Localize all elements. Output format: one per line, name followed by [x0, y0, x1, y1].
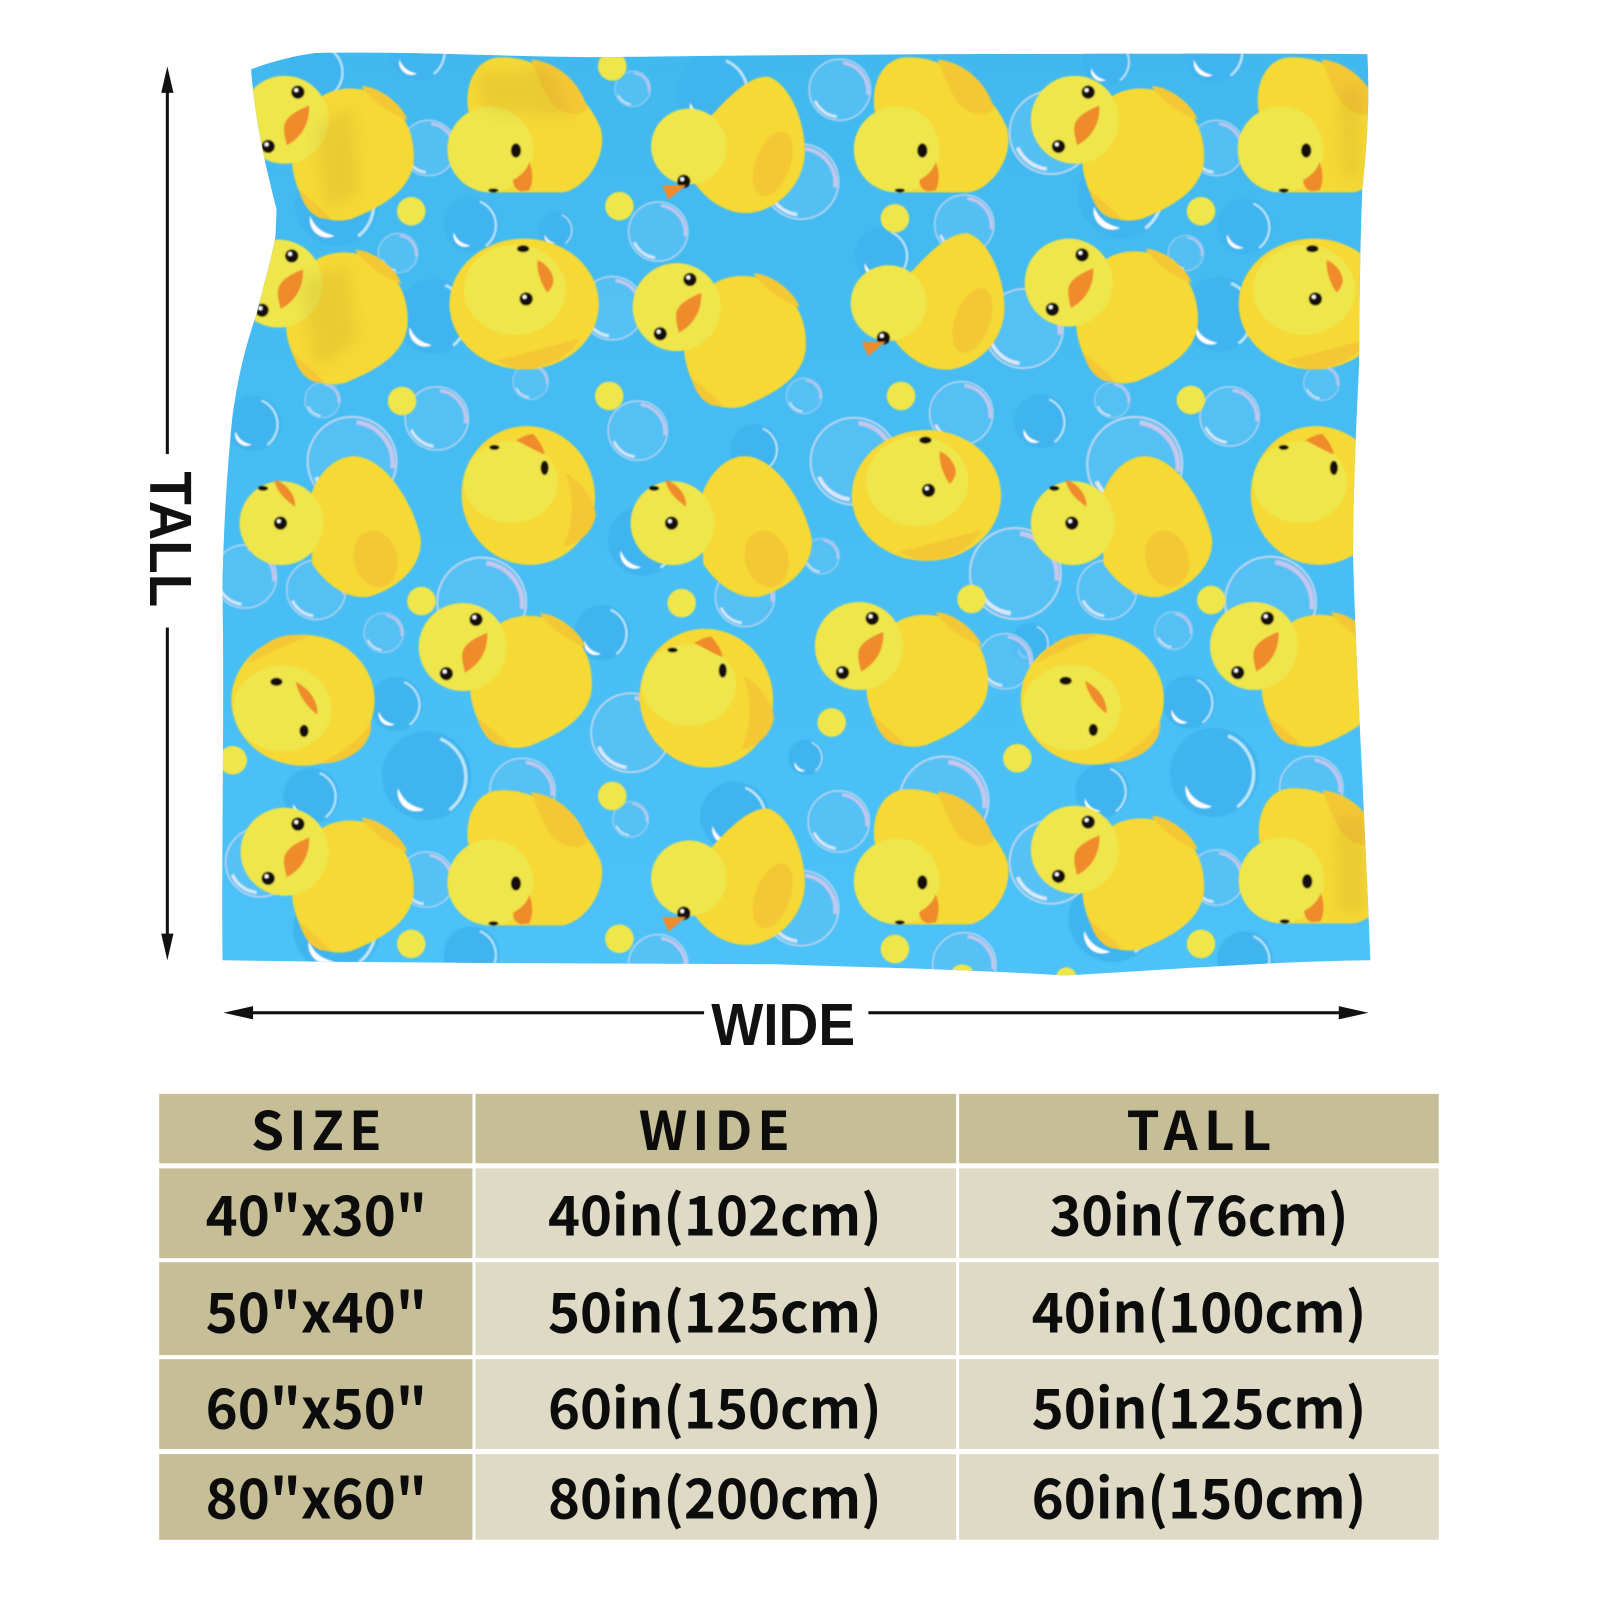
fabric fold shading — [301, 67, 1365, 913]
row 80x60: 80"x60" — [206, 1454, 427, 1534]
row 50x40: 50in(125cm) — [548, 1269, 882, 1349]
table cell backgrounds — [159, 1094, 1439, 1540]
tall label: TALL — [137, 471, 204, 607]
row 60x50: 60in(150cm) — [548, 1365, 882, 1445]
size table — [159, 1089, 1439, 1540]
duck row 3 — [238, 425, 1356, 598]
table header row: SIZE — [251, 1089, 382, 1166]
row 80x60 — [206, 1454, 1366, 1534]
row 80x60: 80in(200cm) — [548, 1454, 882, 1534]
blanket illustration — [204, 19, 1400, 996]
iridescent bubbles — [213, 59, 1343, 996]
wide dimension arrow — [223, 1006, 1368, 1019]
row 80x60: 60in(150cm) — [1032, 1454, 1366, 1534]
table header row — [251, 1089, 1271, 1166]
row 40x30: 30in(76cm) — [1049, 1172, 1348, 1252]
row 40x30: 40"x30" — [206, 1172, 427, 1252]
duck row 1 — [241, 57, 1392, 221]
wide label: WIDE — [711, 991, 855, 1058]
duck row 2 — [234, 233, 1388, 408]
blue bubbles — [225, 19, 1273, 987]
row 60x50: 50in(125cm) — [1032, 1365, 1366, 1445]
row 50x40: 50"x40" — [206, 1269, 427, 1349]
table header row: TALL — [1127, 1089, 1271, 1166]
row 40x30 — [206, 1172, 1348, 1252]
row 60x50: 60"x50" — [206, 1365, 427, 1445]
table header row: WIDE — [639, 1089, 790, 1166]
duck row 5 — [241, 788, 1393, 953]
row 60x50 — [206, 1365, 1366, 1445]
row 40x30: 40in(102cm) — [548, 1172, 882, 1252]
tall dimension arrow — [161, 66, 173, 960]
row 50x40: 40in(100cm) — [1032, 1269, 1366, 1349]
row 50x40 — [206, 1269, 1366, 1349]
yellow dots — [218, 52, 1226, 989]
duck row 4 — [231, 602, 1383, 783]
